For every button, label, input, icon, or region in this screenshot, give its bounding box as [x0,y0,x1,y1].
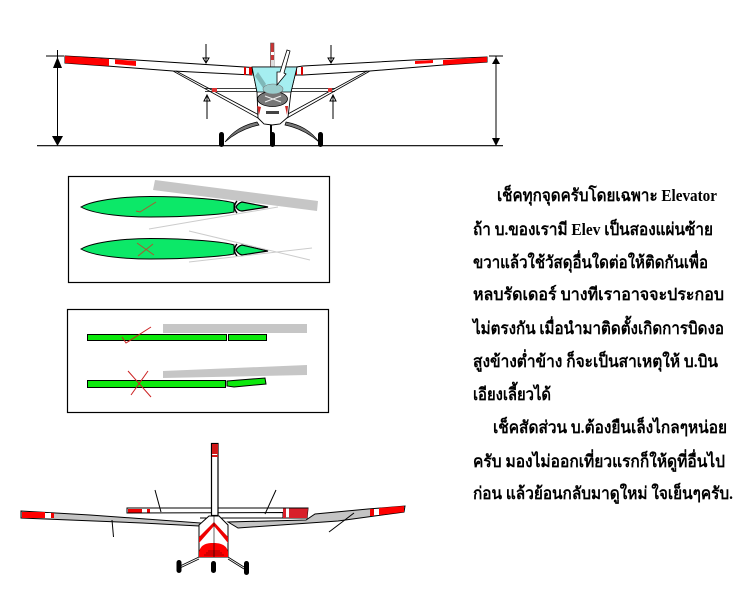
text block: Thai explanation: ถ้า บ.ของเรามี Elev เป็นสองแผ่นซ้าย [473,217,713,239]
far elevator [127,508,308,518]
correct airfoil [81,196,278,229]
fuselage [199,516,228,557]
gray reference bar [153,180,318,211]
landing gear [219,122,323,147]
landing gear [176,557,249,575]
correct bars [88,327,266,343]
ground line [37,145,503,147]
text block: Thai explanation: เช็คสัดส่วน บ.ต้องยืนเล็งไกลๆหน่อย [493,415,727,437]
gray bar straight [163,324,307,333]
text block: Thai explanation: สูงข้างต่ำข้าง ก็จะเป็นสาเหตุให้ บ.บิน [473,349,718,373]
fuselage [252,67,297,125]
text block: Thai explanation: เอียงเลี้ยวได้ [473,381,551,404]
text block: Thai explanation: เช็คทุกจุดครับโดยเฉพาะ Elevator [497,183,717,206]
incorrect airfoil [81,231,312,262]
left height arrow [46,50,64,146]
incorrect bars [88,371,266,397]
front view aircraft with height measurement [37,43,503,147]
rear view aircraft [21,444,405,575]
panel: airfoil side view [68,176,330,282]
tail fin [270,43,274,68]
left wing [21,490,201,537]
fin [212,444,218,516]
deflection arrows [203,44,336,119]
right height arrow [489,56,503,146]
pointer arrow to windshield [277,50,290,85]
text block: Thai explanation: หลบรัดเดอร์ บางทีเราอาจจะประกอบ [473,284,724,304]
text block: Thai explanation: ไม่ตรงกัน เมื่อนำมาติดตั้งเกิดการบิดงอ [471,315,724,338]
text block: Thai explanation [471,183,733,505]
text block: Thai explanation: ครับ มองไม่ออกเที่ยวแรกก็ให้ดูที่อื่นไป [473,449,725,473]
wing struts [173,71,370,118]
right wing [293,57,487,75]
left wing [65,56,252,75]
text block: Thai explanation: ขวาแล้วใช้วัสดุอื่นใดต่อให้ติดกันเพื่อ [473,250,708,273]
gray bar tilted [163,365,307,378]
panel: elevator alignment view [68,310,328,412]
right wing [228,490,405,532]
